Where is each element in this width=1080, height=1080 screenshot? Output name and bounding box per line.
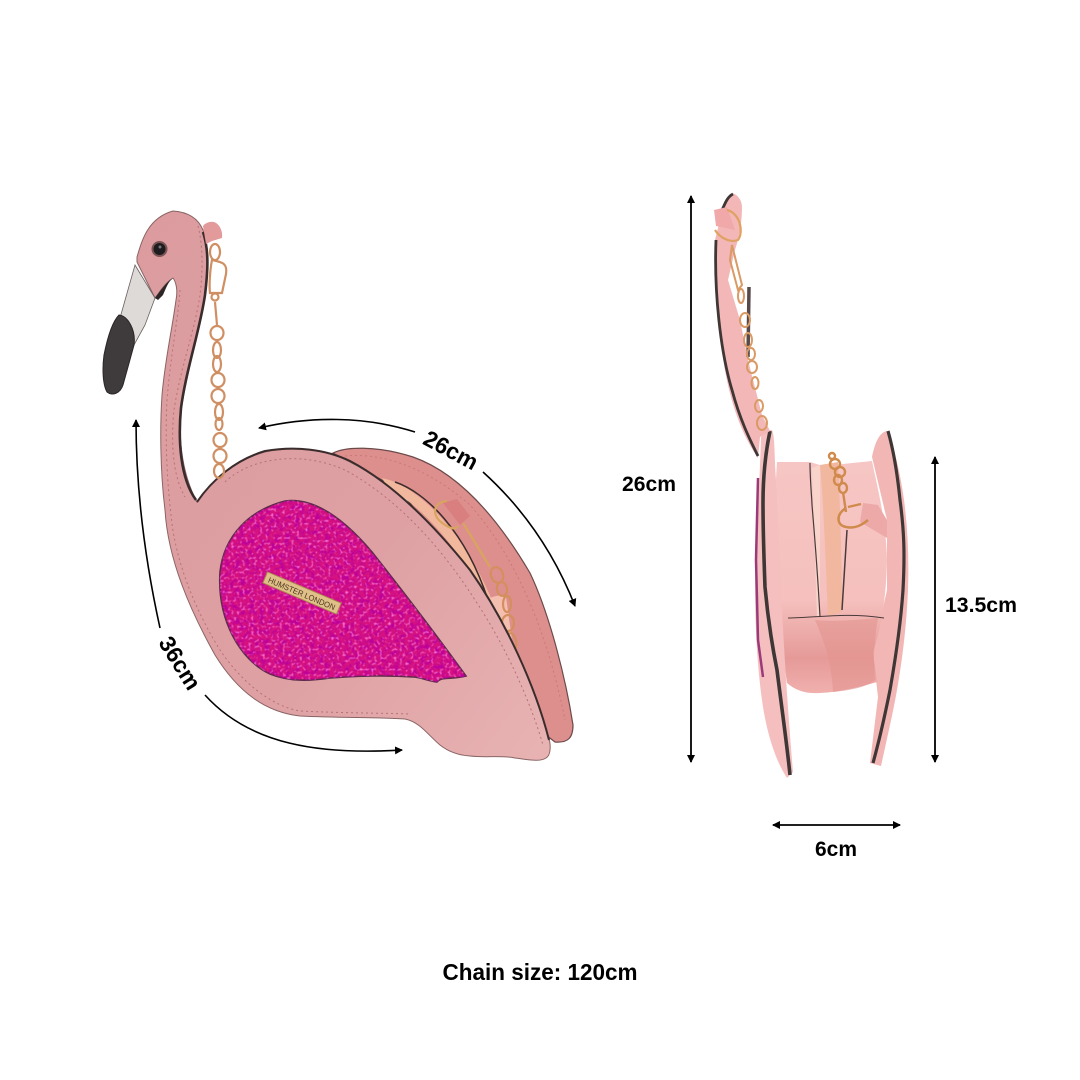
glitter edge: [756, 478, 763, 677]
arrow: 13.5cm height: [934, 457, 936, 762]
caption: chain size: Chain size: 120cm: [442, 959, 638, 985]
body and neck: [137, 211, 550, 760]
side strap: [860, 503, 887, 538]
brand plate: HUMSTER LONDON: [267, 576, 337, 612]
top ring and tab: [714, 207, 741, 241]
middle gusset: [775, 461, 887, 693]
zipper inner panel and lip: [395, 482, 488, 600]
label: 26cm curved: 26cm: [419, 425, 483, 475]
zipper: [788, 462, 884, 618]
side chain cluster and ring: [829, 453, 868, 528]
label: 6cm: 6cm: [815, 838, 857, 861]
flamingo bag front view: [103, 211, 573, 760]
neck dark edge: [180, 232, 207, 500]
stitching: [166, 226, 543, 745]
arrow: 6cm width: [773, 824, 900, 826]
side hanging chain: [730, 245, 767, 430]
eye: [152, 241, 168, 257]
strap tab and ring: [435, 499, 490, 567]
head strap tab: [203, 222, 222, 244]
front panel: [755, 430, 793, 778]
gusset shading: [815, 618, 878, 692]
hanging chain: [210, 244, 226, 478]
beak: [103, 265, 173, 394]
label: 36cm curved: 36cm: [154, 632, 206, 694]
flamingo bag side view: [714, 193, 908, 778]
back panel: [870, 431, 908, 766]
zipper panel: [382, 478, 500, 618]
infographic canvas: [102, 192, 1016, 980]
pale lining wedge: [486, 596, 512, 640]
label: 26cm height: 26cm: [622, 473, 676, 496]
arrow: 26cm height: [690, 196, 692, 762]
top neck strip: [715, 193, 770, 458]
arrow: 36cm curve: [136, 420, 402, 751]
back flap of bag: [333, 448, 573, 742]
arrow: 26cm top curve: [259, 419, 575, 606]
label: 13.5cm: 13.5cm: [945, 594, 1017, 617]
wing glitter panel: [215, 495, 470, 690]
neck dark back: [748, 287, 749, 357]
body dark top edge: [197, 449, 549, 740]
back chain: [489, 565, 518, 650]
